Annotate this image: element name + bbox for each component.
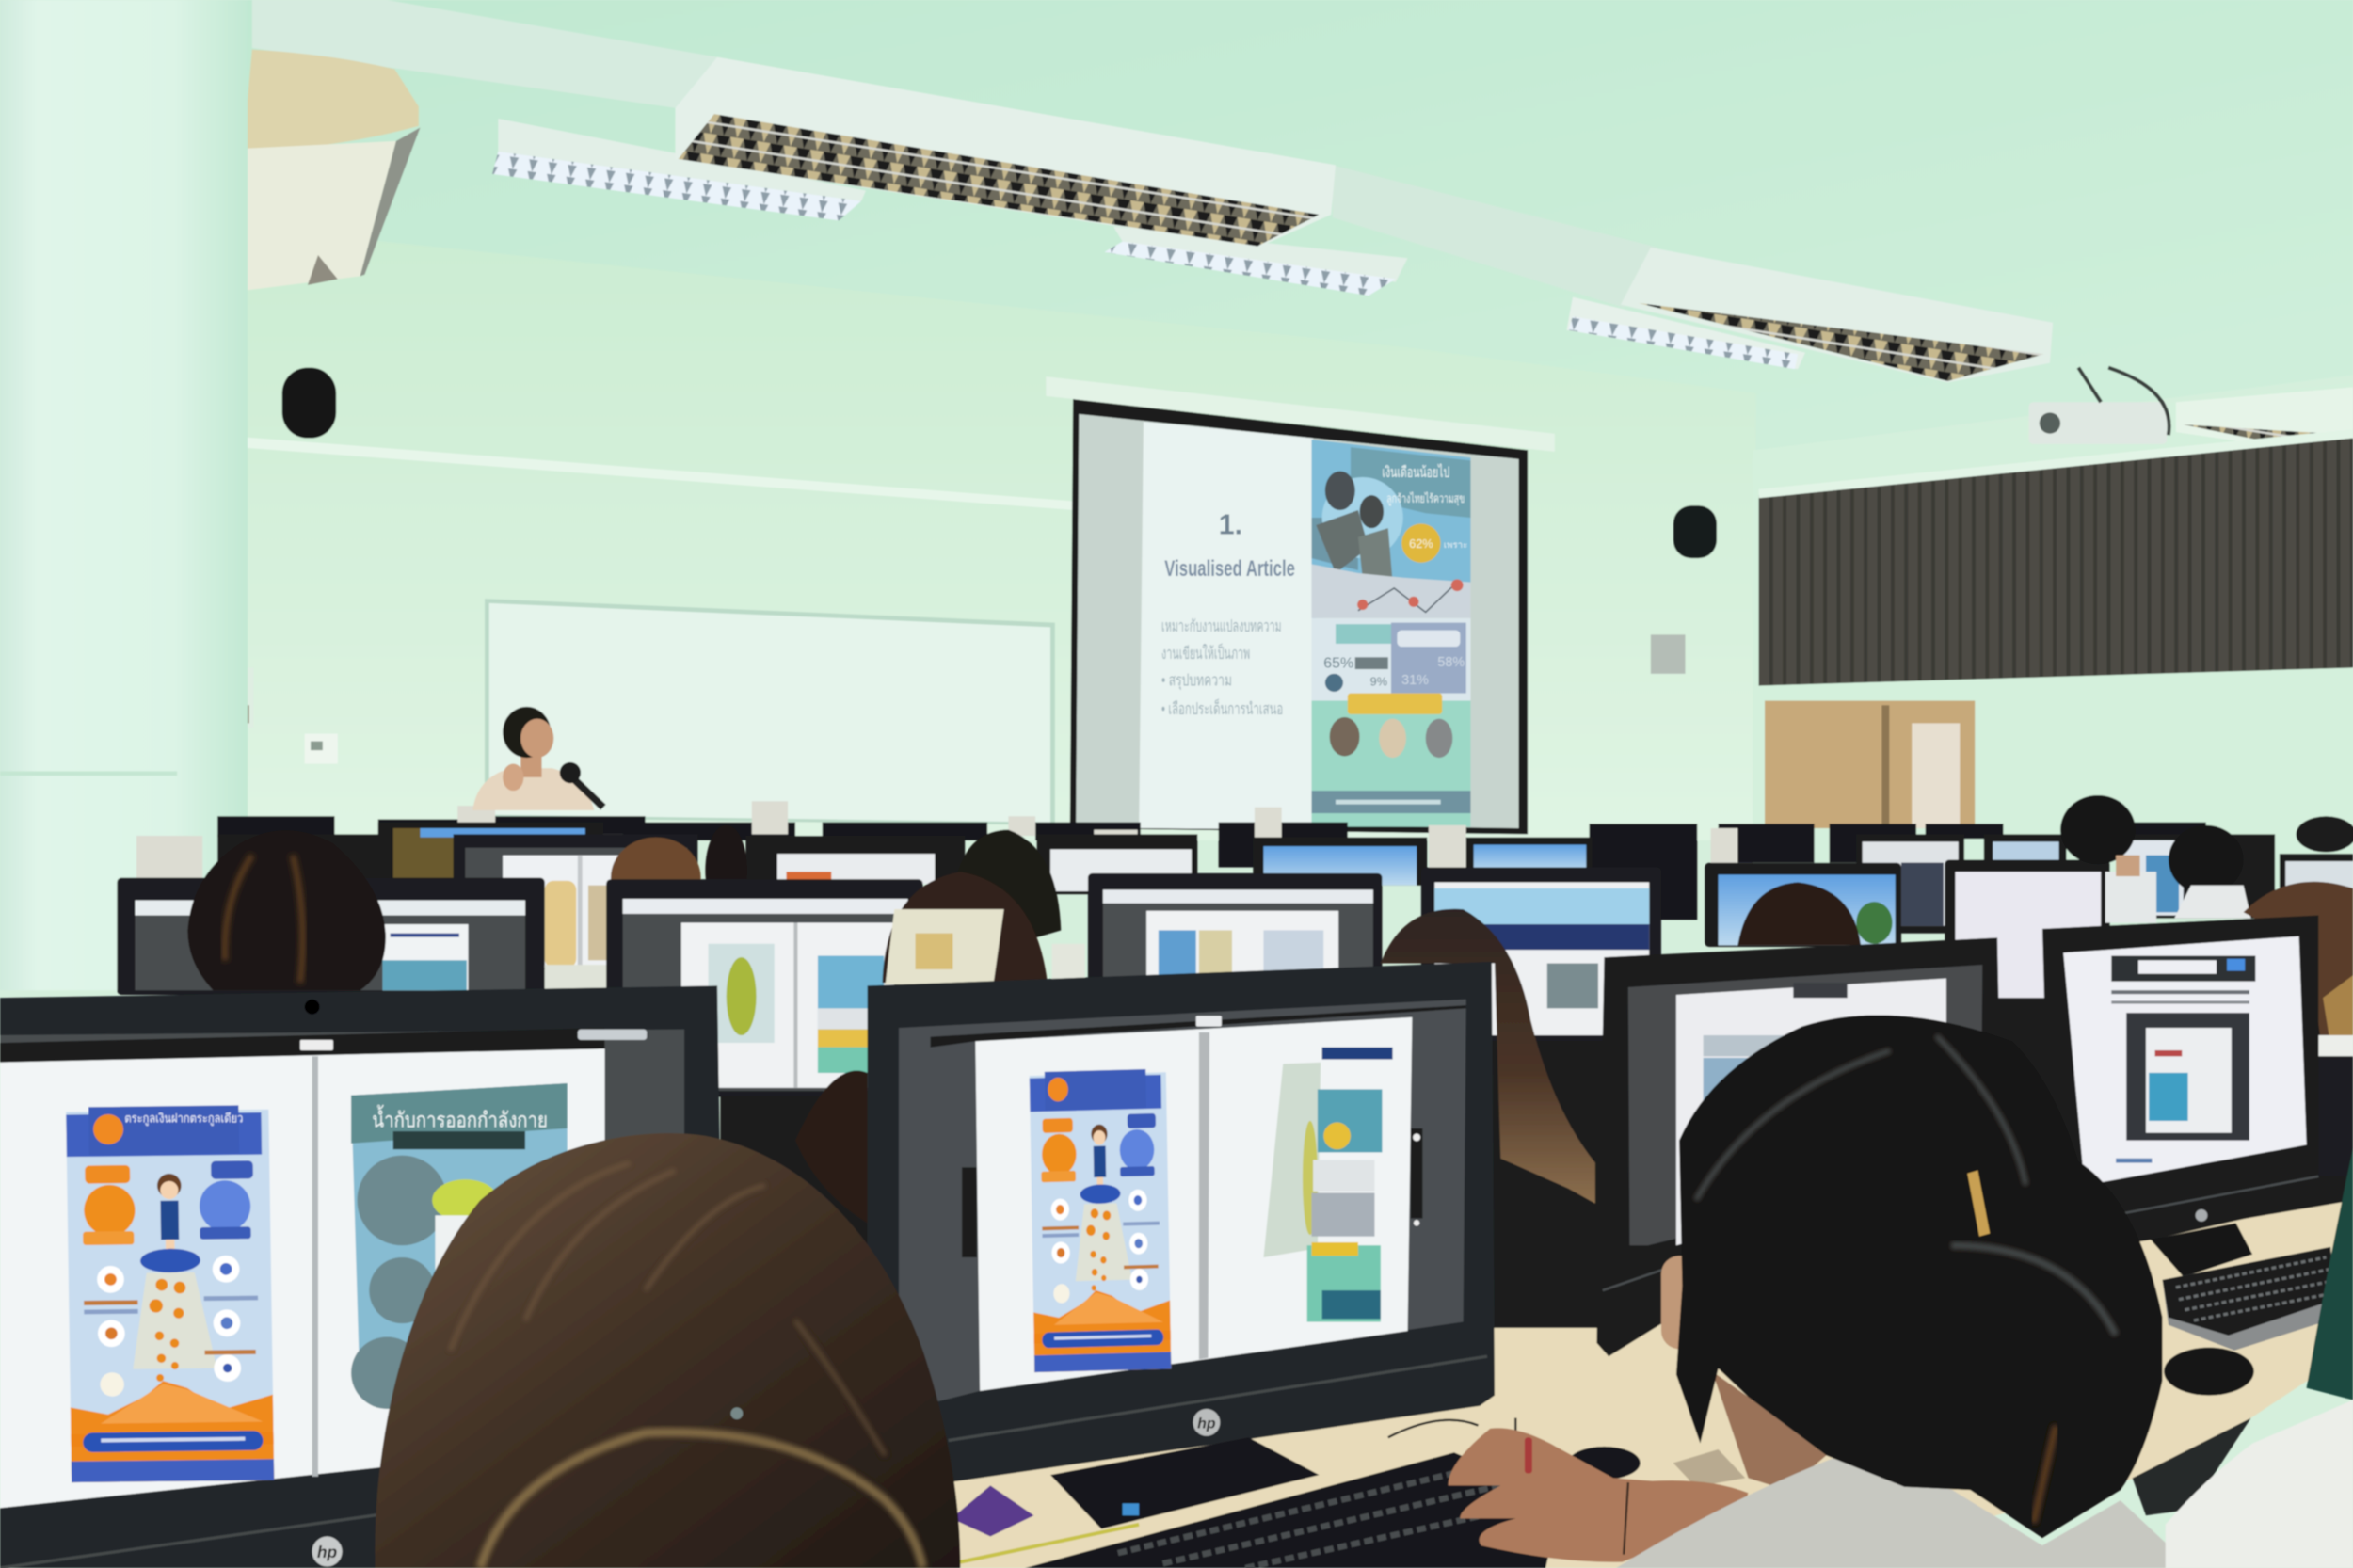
toolbar band	[931, 1005, 1466, 1048]
central monitor stand	[1050, 1437, 1319, 1529]
ceiling projector	[2029, 368, 2169, 444]
students back right	[2060, 795, 2353, 1050]
hand on keyboard	[1449, 1428, 1748, 1562]
browser header	[2111, 956, 2255, 982]
student head top left	[187, 830, 386, 990]
ceiling beam right	[1333, 165, 1658, 308]
banana image	[709, 944, 775, 1043]
mouse behind hand	[1568, 1447, 1641, 1480]
slide infographic: 58%	[1437, 655, 1465, 670]
ceiling beam to fixture	[252, 0, 717, 108]
speaker right	[1673, 505, 1717, 558]
slide heading: Visualised Article	[1164, 556, 1295, 582]
embedded screenshot	[2126, 1013, 2249, 1141]
chair and shirt behind right monitor	[2318, 1035, 2353, 1176]
slide infographic: 31%	[1401, 673, 1429, 688]
desk surface	[937, 1200, 2353, 1568]
pillar	[0, 0, 248, 990]
yellow edge stripe	[960, 1525, 1139, 1562]
slide infographic: เงินเดือนน้อยไป	[1382, 463, 1449, 481]
page spread	[0, 1048, 605, 1508]
curtain	[1759, 429, 2353, 686]
far row of monitors	[217, 816, 2206, 920]
speaker left	[282, 368, 336, 439]
landscape wallpaper	[393, 828, 483, 879]
mouse far right	[2164, 1348, 2254, 1396]
keyboard far right	[2163, 1247, 2338, 1351]
white shirt right student	[1616, 1459, 2192, 1568]
air conditioner	[240, 50, 420, 291]
student with hair and paper	[883, 872, 1085, 984]
wall box	[1651, 634, 1685, 674]
student dark hair mid right	[1737, 882, 1861, 945]
second row of monitors	[217, 823, 2353, 969]
third row monitor right	[1421, 867, 1661, 1041]
central infographic	[1030, 1068, 1171, 1372]
right side wall	[1753, 383, 2353, 930]
monitor blank white	[1945, 860, 2110, 1016]
slide infographic: ลูกจ้างไทยไร้ความสุข	[1386, 491, 1465, 506]
windows sticker	[1123, 1503, 1139, 1515]
lower scene shadow band	[720, 998, 2353, 1358]
right infographic title: น้ำกับการออกกำลังกาย	[372, 1104, 548, 1131]
left foreground monitor	[0, 985, 723, 1568]
monitor page spread	[975, 1017, 1412, 1391]
projector screen housing	[1046, 376, 1555, 452]
slide infographic: เพราะ	[1444, 540, 1467, 551]
ceiling light center	[1104, 227, 1408, 296]
slide white area	[1139, 422, 1313, 830]
door	[1765, 701, 1975, 828]
central monitor	[868, 962, 1495, 1482]
wall thermostat and switches	[179, 667, 338, 830]
slide infographic: 65%	[1323, 655, 1353, 671]
dark desk dividers	[795, 1070, 868, 1223]
slide heading number: 1.	[1219, 510, 1242, 541]
long hair student	[1381, 909, 1595, 1204]
HP logo left: hp	[317, 1543, 338, 1561]
third row monitor center	[1088, 873, 1382, 982]
slide infographic: 62%	[1409, 536, 1433, 551]
right ceiling light large	[1621, 248, 2053, 383]
slide infographic	[1311, 440, 1470, 826]
purple snack wrapper	[952, 1485, 1034, 1537]
paper name tags	[136, 801, 1737, 878]
central keyboard	[1025, 1452, 1561, 1568]
monitor far right	[2042, 915, 2318, 1277]
ceiling	[0, 0, 2353, 450]
face and neck skin right student	[1661, 1256, 1826, 1490]
third row monitor center left	[606, 879, 923, 1096]
whiteboard	[485, 599, 1055, 825]
dark edge under desk	[2133, 1418, 2251, 1515]
far right ceiling light	[2176, 387, 2353, 459]
left infographic	[66, 1105, 274, 1482]
monitor right center	[1596, 937, 2002, 1356]
upper wall panel lines	[237, 437, 1075, 510]
icons screen	[1901, 863, 1944, 926]
third row monitor left	[117, 878, 545, 995]
projector screen	[1070, 399, 1528, 834]
foreground student head right	[1676, 1015, 2163, 1538]
back wall	[225, 225, 1755, 840]
toolbar band	[0, 1028, 605, 1063]
page spread with orange infographic	[503, 856, 671, 968]
desk cable	[1388, 1418, 1515, 1463]
large ceiling light fixture	[675, 57, 1336, 248]
HP logo: hp	[1197, 1416, 1216, 1432]
foreground student head left	[375, 1133, 960, 1568]
phone on desk	[1673, 1449, 1745, 1487]
right ceiling light small	[1567, 297, 1805, 369]
teal hair edge far right	[2307, 1148, 2353, 1400]
right infographic	[351, 1083, 568, 1409]
slide body text	[1161, 616, 1283, 718]
screen toolbar	[300, 1040, 333, 1050]
slide body text: • สรุปบทความ	[1161, 671, 1232, 691]
article teal infographic	[818, 956, 884, 1073]
white shirt far right	[2166, 1400, 2353, 1568]
left infographic title text: ตระกูลเงินฝากตระกูลเดียว	[124, 1112, 243, 1127]
monitor mid right	[1705, 863, 1901, 947]
slide body text: เหมาะกับงานแปลงบทความ	[1161, 616, 1282, 635]
ceiling light left	[492, 119, 866, 220]
presenter	[472, 707, 603, 810]
slide infographic: 9%	[1370, 675, 1387, 689]
slide body text: • เลือกประเด็นการนำเสนอ	[1161, 698, 1283, 718]
slide body text: งานเขียนให้เป็นภาพ	[1161, 643, 1250, 663]
distant students	[611, 825, 1061, 937]
white shirt back student	[545, 965, 614, 989]
